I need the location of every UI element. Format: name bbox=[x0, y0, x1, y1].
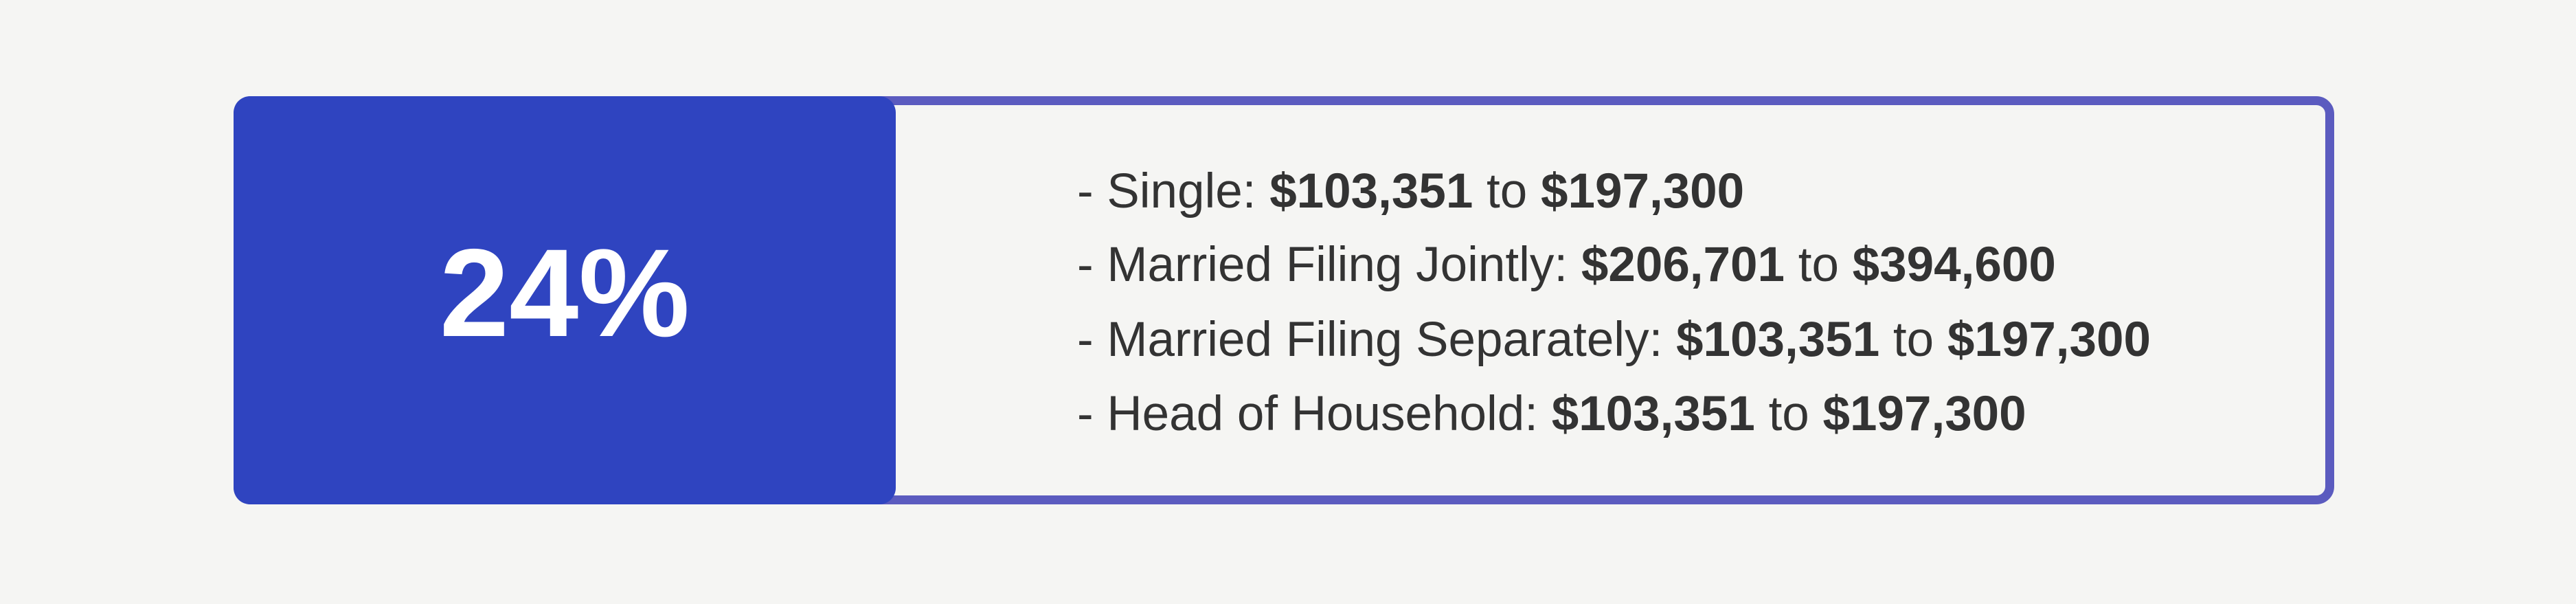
line: single: - Single: $103,351 to $197,300 bbox=[1077, 164, 1744, 219]
panel: bracket card bbox=[234, 96, 2334, 504]
heading: rate 24%: 24% bbox=[440, 223, 690, 363]
line: married jointly: - Married Filing Jointly: $206,701 to $394,600 bbox=[1077, 238, 2056, 292]
text block: income ranges bbox=[1077, 164, 2151, 441]
line: head of household: - Head of Household: $103,351 to $197,300 bbox=[1077, 387, 2026, 441]
panel: rate block bbox=[234, 96, 896, 504]
line: married separately: - Married Filing Separately: $103,351 to $197,300 bbox=[1077, 313, 2151, 367]
